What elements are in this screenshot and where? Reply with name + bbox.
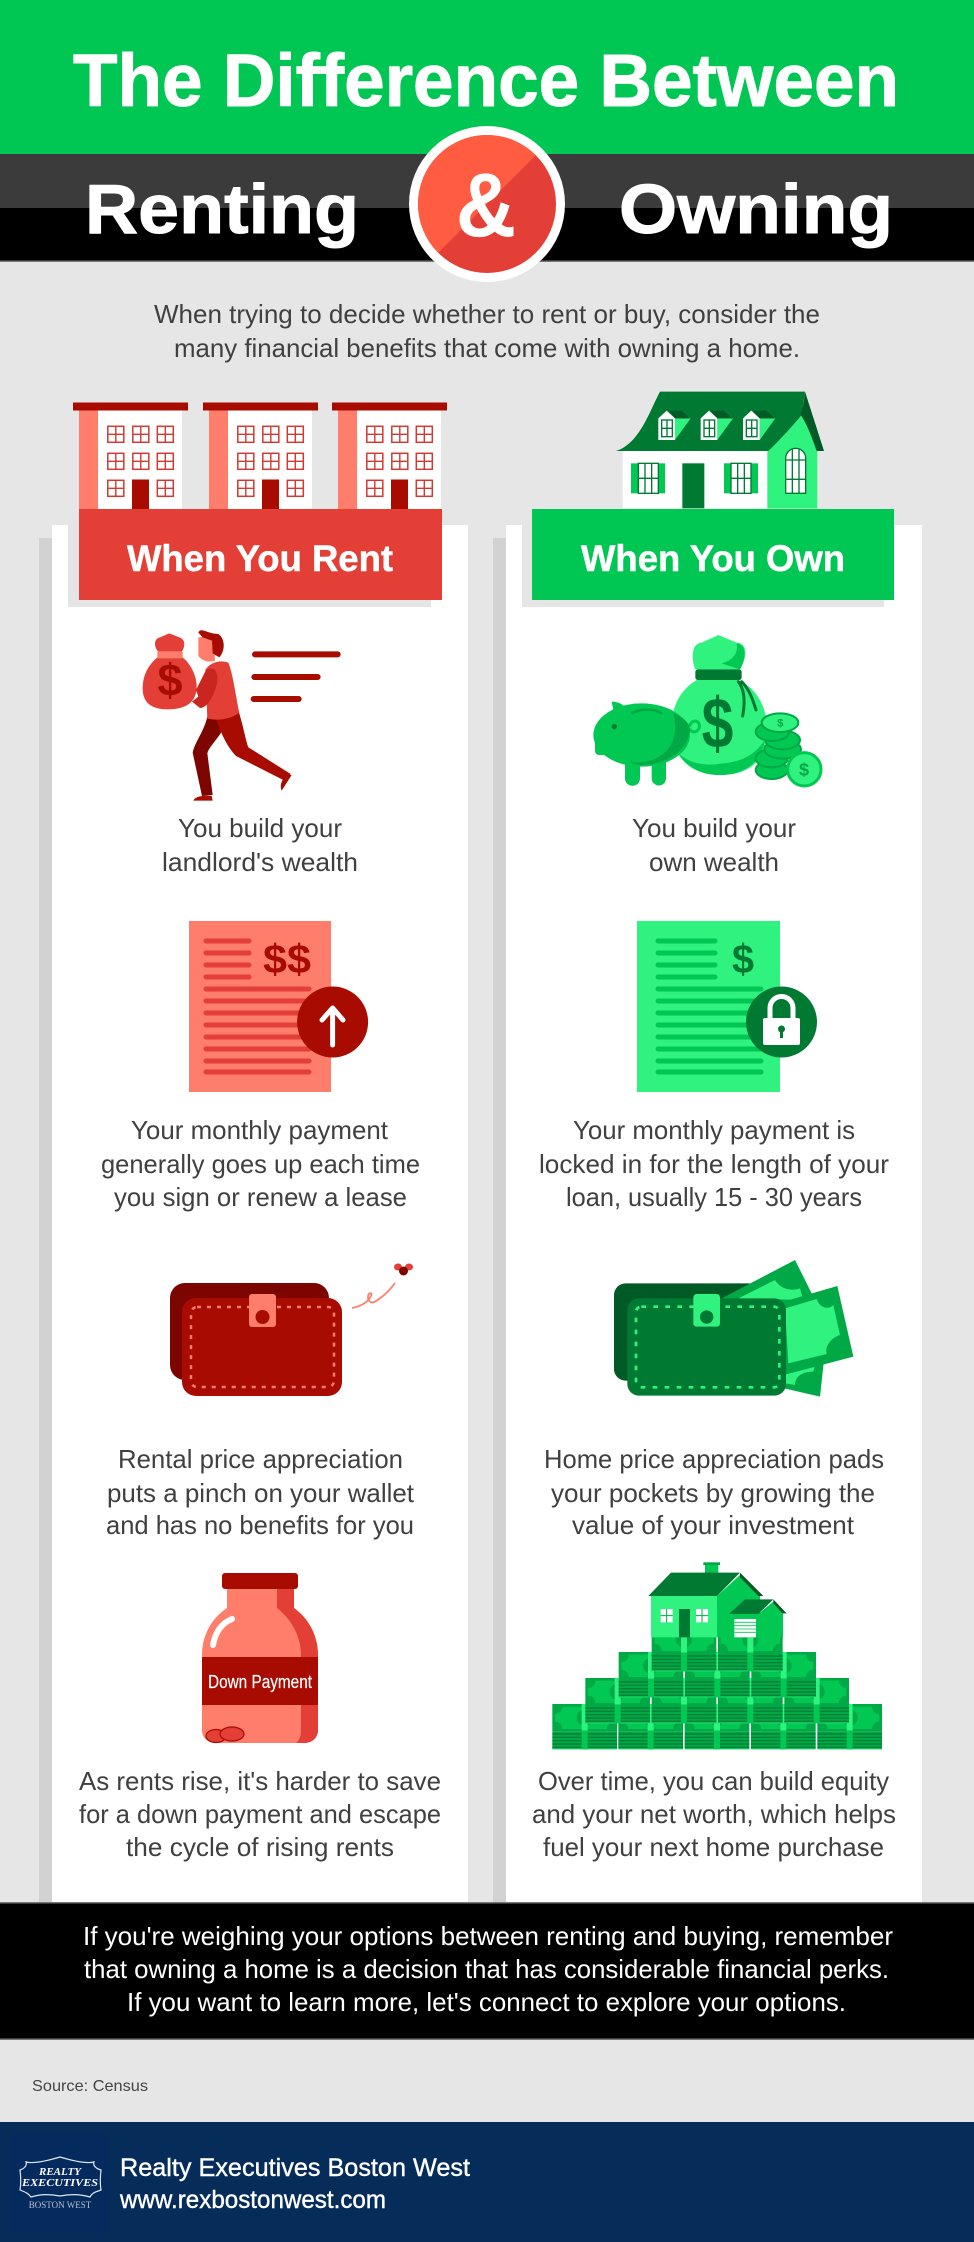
intro text: many financial benefits that come with owning a home. bbox=[174, 333, 800, 363]
text: build equity: Over time, you can build equity bbox=[538, 1766, 889, 1796]
header banner bbox=[0, 0, 974, 282]
icon: lease with rising payment: $$ bbox=[263, 936, 311, 982]
icon: mortgage with lock: $ bbox=[732, 936, 754, 982]
text: build equity bbox=[532, 1766, 896, 1862]
title: Owning: Owning bbox=[619, 170, 893, 248]
icon: green house bbox=[616, 392, 824, 508]
icon: house on pile of money bbox=[552, 1562, 882, 1749]
text: rental appreciation: Rental price appreciation bbox=[118, 1444, 403, 1474]
text: home appreciation: your pockets by growing the bbox=[551, 1478, 875, 1508]
text: own wealth: own wealth bbox=[649, 847, 779, 877]
text: home appreciation: value of your investment bbox=[572, 1510, 855, 1540]
ampersand badge: & bbox=[456, 156, 516, 256]
text: harder to save: As rents rise, it's harder to save bbox=[79, 1766, 441, 1796]
icon: piggy bank and money bag: $ bbox=[702, 683, 733, 763]
conclusion band: that owning a home is a decision that has considerable financial perks. bbox=[84, 1954, 889, 1984]
title: The Difference Between bbox=[73, 39, 899, 122]
panel: when you own bbox=[493, 392, 922, 1902]
text: harder to save: the cycle of rising rents bbox=[126, 1832, 394, 1862]
icon: apartment buildings bbox=[73, 402, 447, 510]
icon: empty wallet with moth bbox=[170, 1264, 413, 1396]
logo bbox=[12, 2134, 109, 2231]
text: harder to save bbox=[79, 1766, 441, 1862]
icon: down payment jar bbox=[202, 1573, 318, 1743]
text: build equity: and your net worth, which helps bbox=[532, 1799, 896, 1829]
rent heading: When You Rent bbox=[127, 538, 393, 579]
text: monthly payment rises: generally goes up each time bbox=[101, 1149, 420, 1179]
text: monthly payment rises: Your monthly payment bbox=[131, 1115, 389, 1145]
logo: REALTY bbox=[38, 2166, 82, 2178]
text: rental appreciation: and has no benefits for you bbox=[106, 1510, 414, 1540]
logo: BOSTON WEST bbox=[29, 2200, 92, 2210]
rent heading bbox=[68, 509, 442, 607]
text: home appreciation bbox=[544, 1444, 884, 1540]
text: landlord's wealth bbox=[162, 813, 358, 877]
text: landlord's wealth: You build your bbox=[178, 813, 342, 843]
text: rental appreciation: puts a pinch on your wallet bbox=[107, 1478, 415, 1508]
text: harder to save: for a down payment and escape bbox=[79, 1799, 441, 1829]
intro text bbox=[154, 299, 820, 363]
icon: piggy bank and money bag: $ bbox=[777, 718, 784, 730]
icon: person carrying money bag bbox=[143, 630, 338, 801]
icon: piggy bank and money bag bbox=[593, 635, 821, 786]
text: build equity: fuel your next home purchase bbox=[543, 1832, 884, 1862]
website: www.rexbostonwest.com bbox=[119, 2186, 386, 2214]
text: own wealth bbox=[632, 813, 796, 877]
text: monthly payment rises bbox=[101, 1115, 420, 1212]
text: monthly payment rises: you sign or renew a lease bbox=[114, 1182, 407, 1212]
own heading: When You Own bbox=[581, 538, 845, 579]
conclusion band: If you want to learn more, let's connect to explore your options. bbox=[127, 1987, 846, 2017]
icon: piggy bank and money bag: $ bbox=[799, 760, 809, 780]
icon: mortgage with lock bbox=[637, 921, 817, 1092]
icon: person carrying money bag: $ bbox=[157, 654, 183, 705]
panel: when you rent bbox=[39, 402, 468, 1902]
text: locked payment: Your monthly payment is bbox=[573, 1115, 855, 1145]
conclusion band bbox=[0, 1902, 974, 2040]
text: locked payment bbox=[539, 1115, 889, 1212]
source note: Source: Census bbox=[32, 2078, 148, 2095]
text: home appreciation: Home price appreciation pads bbox=[544, 1444, 884, 1474]
intro text: When trying to decide whether to rent or buy, consider the bbox=[154, 299, 820, 329]
text: own wealth: You build your bbox=[632, 813, 796, 843]
icon: wallet with cash bbox=[614, 1260, 853, 1397]
icon: lease with rising payment bbox=[189, 921, 368, 1092]
ampersand badge bbox=[409, 126, 565, 282]
text: landlord's wealth: landlord's wealth bbox=[162, 847, 358, 877]
own heading bbox=[522, 509, 894, 607]
logo: EXECUTIVES bbox=[21, 2177, 98, 2189]
conclusion band: If you're weighing your options between renting and buying, remember bbox=[83, 1921, 893, 1951]
text: rental appreciation bbox=[106, 1444, 415, 1540]
footer bbox=[0, 2122, 974, 2242]
text: locked payment: loan, usually 15 - 30 years bbox=[566, 1182, 862, 1212]
company name: Realty Executives Boston West bbox=[120, 2154, 470, 2182]
title: Renting: Renting bbox=[85, 170, 359, 248]
text: locked payment: locked in for the length of your bbox=[539, 1149, 889, 1179]
icon: down payment jar: Down Payment bbox=[208, 1672, 312, 1692]
